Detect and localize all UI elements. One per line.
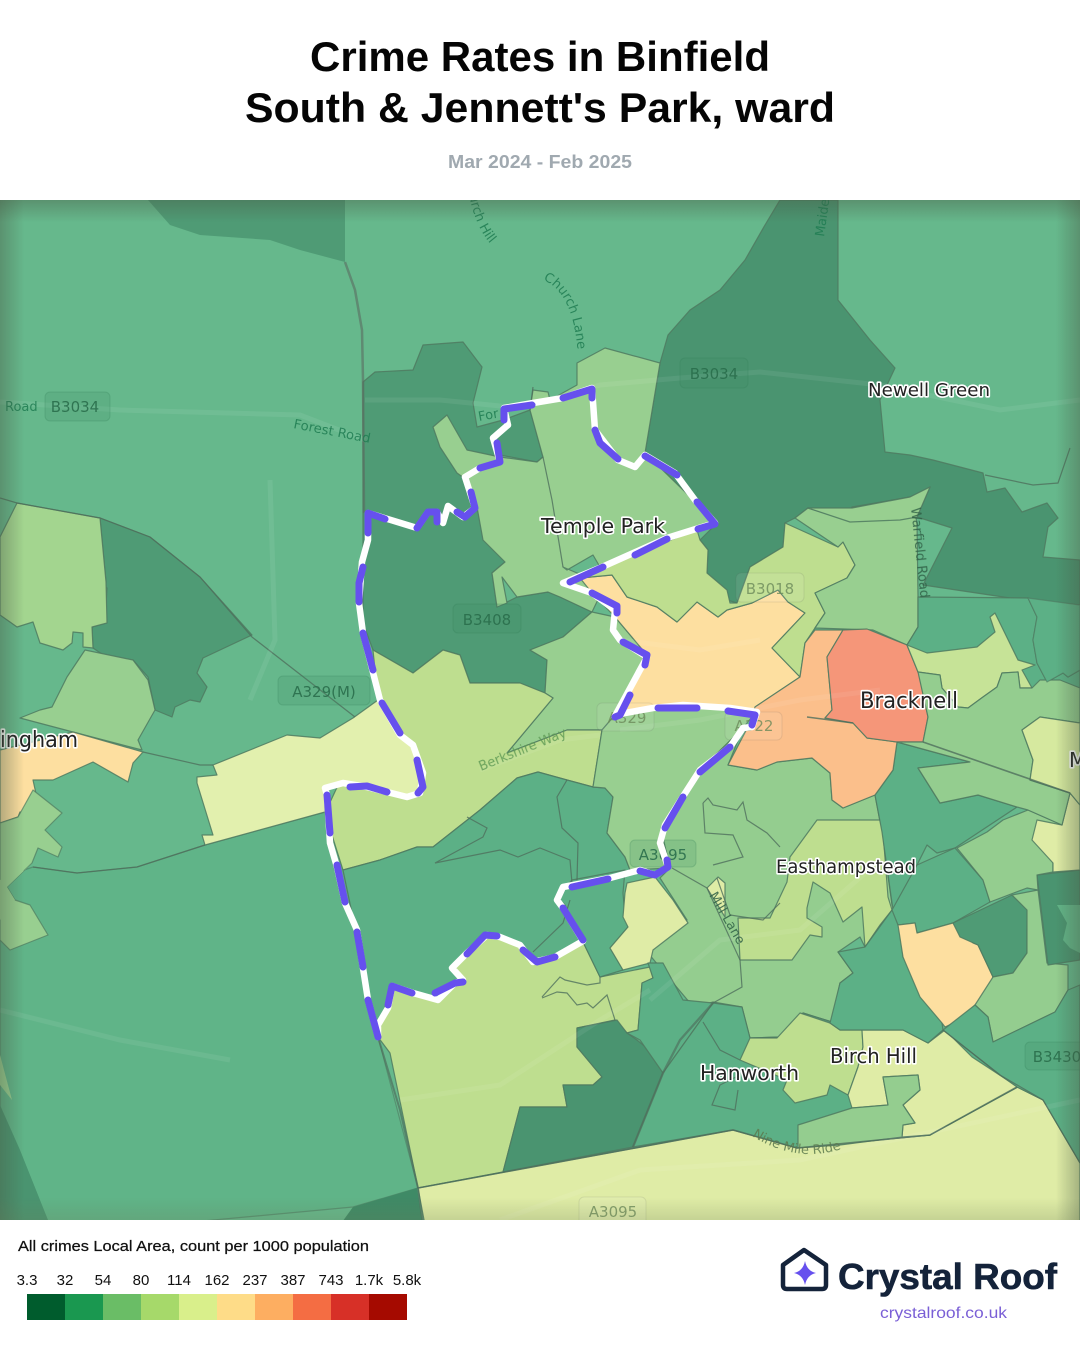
- road network: [11, 370, 1072, 1141]
- map place labels: [0, 380, 1080, 1085]
- legend scale values: 3.3: [17, 1272, 37, 1289]
- road name labels: Forest Road: [292, 417, 372, 447]
- ward boundary: purple dashes: [327, 389, 755, 1037]
- choropleth map: [0, 200, 1080, 1266]
- website url: crystalroof.co.uk: [880, 1305, 1008, 1322]
- legend scale values: 80: [133, 1272, 149, 1289]
- road shields: A329(M): [292, 683, 356, 701]
- road name labels: For: [477, 407, 500, 425]
- map base area: [0, 200, 1080, 1220]
- ward boundary: white base line: [325, 388, 757, 1037]
- road name labels: Maide: [813, 198, 833, 238]
- boundary lines: [0, 262, 1080, 1225]
- legend scale values: 1.7k: [355, 1272, 384, 1289]
- road name labels: Road: [5, 400, 38, 415]
- wordmark: Crystal Roof: [838, 1256, 1058, 1297]
- road shields: [45, 358, 1080, 1070]
- road name labels: Warfield Road: [907, 507, 931, 599]
- legend scale values: 237: [242, 1272, 268, 1289]
- legend scale values: 387: [280, 1272, 306, 1289]
- road shields: B3408: [463, 611, 511, 629]
- legend scale values: 5.8k: [393, 1272, 422, 1289]
- map place labels: Easthampstead: [776, 856, 916, 878]
- legend colour scale: [27, 1294, 407, 1320]
- map edge vignette: [0, 200, 1080, 1220]
- road shields: A3095: [639, 846, 687, 864]
- legend scale values: 114: [167, 1272, 191, 1289]
- road name labels: Church Hill: [470, 200, 497, 243]
- road name labels: [6, 200, 930, 1154]
- map place labels: Temple Park: [540, 514, 665, 538]
- map place labels: ingham: [0, 728, 78, 753]
- map place labels: Birch Hill: [830, 1044, 917, 1068]
- local area polygons: [0, 200, 1080, 1225]
- map place labels: Hanworth: [700, 1061, 799, 1085]
- subtitle: date range: Mar 2024 - Feb 2025: [448, 152, 632, 172]
- legend title: All crimes Local Area, count per 1000 population: [18, 1238, 369, 1255]
- map place labels: Bracknell: [860, 689, 958, 714]
- logo: Crystal Roof: [783, 1250, 1058, 1322]
- faint road shields: A322: [735, 717, 773, 735]
- road name labels: Church Lane: [545, 273, 584, 348]
- map place labels: Newell Green: [868, 380, 990, 401]
- road name labels: Mill Lane: [706, 890, 748, 947]
- faint road shields: A329: [608, 709, 646, 727]
- legend scale values: 162: [204, 1272, 230, 1289]
- legend: [17, 1238, 422, 1320]
- road name labels: Berkshire Way: [477, 726, 569, 775]
- title: Crime Rates in Binfield: [310, 33, 770, 80]
- icon: house with star: [783, 1250, 826, 1289]
- faint road shields: A3095: [589, 1203, 637, 1221]
- road shields: B3430: [1033, 1048, 1080, 1066]
- road name labels: Nine Mile Ride: [753, 1128, 840, 1154]
- title: [245, 33, 835, 131]
- road shields: B3034: [690, 365, 738, 383]
- legend scale values: 54: [95, 1272, 111, 1289]
- legend scale values: [17, 1272, 422, 1289]
- legend scale values: 32: [57, 1272, 73, 1289]
- title: South & Jennett's Park, ward: [245, 84, 835, 131]
- faint road shields: [579, 573, 804, 1227]
- legend scale values: 743: [318, 1272, 344, 1289]
- faint road shields: B3018: [746, 580, 794, 598]
- road shields: B3034: [51, 398, 99, 416]
